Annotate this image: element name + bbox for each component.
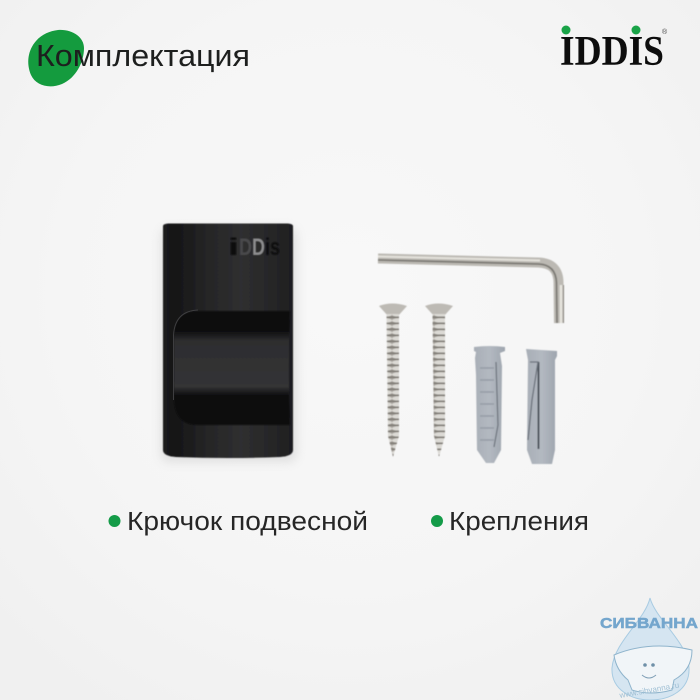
bullet [108, 515, 120, 527]
screw thread [386, 314, 399, 457]
watermark url: www.sibvanna.ru [618, 681, 680, 700]
hook embossed logo: i [228, 234, 239, 261]
product: black wall hook [161, 224, 297, 462]
screw thread [432, 314, 445, 457]
hook body [163, 224, 293, 458]
hook embossed logo [228, 234, 280, 261]
product: screw 2 [425, 304, 453, 457]
hook groove [166, 267, 290, 269]
heading text: Комплектация [36, 38, 250, 73]
hook recess edge [174, 310, 198, 400]
label text: Крепления [449, 508, 589, 536]
logo: IDDIS [560, 26, 668, 75]
plug body [526, 349, 557, 464]
label text: Крючок подвесной [127, 508, 368, 536]
label: Крепления [431, 508, 589, 536]
watermark name: СИБВАННА [600, 615, 698, 632]
hex key shaft [378, 258, 559, 323]
product: screw 1 [379, 304, 407, 457]
bathtub [614, 646, 692, 693]
plug body [474, 346, 505, 463]
bullet [431, 515, 443, 527]
watermark: Сибванна [600, 598, 698, 700]
hook recess [174, 311, 290, 425]
hook embossed logo: is [265, 234, 280, 261]
screw head [425, 304, 453, 316]
heading: Комплектация [28, 30, 250, 86]
product: hex key [378, 256, 564, 323]
label: Крючок подвесной [108, 508, 368, 536]
plug ribs [480, 368, 494, 440]
product: wall plug 2 [526, 349, 557, 464]
plug slit [538, 362, 540, 449]
logo wordmark: IDDIS [560, 29, 664, 75]
product: wall plug 1 [474, 346, 505, 463]
hook shadow [161, 228, 297, 462]
hook embossed logo: D [252, 234, 265, 261]
hook embossed logo: D [239, 234, 252, 261]
green blob behind heading [28, 30, 84, 86]
water drop [612, 598, 689, 700]
logo green dots [562, 26, 640, 34]
plug slit [494, 362, 498, 447]
bathtub face [643, 663, 655, 667]
screw head [379, 304, 407, 316]
registered mark: ® [662, 28, 668, 36]
